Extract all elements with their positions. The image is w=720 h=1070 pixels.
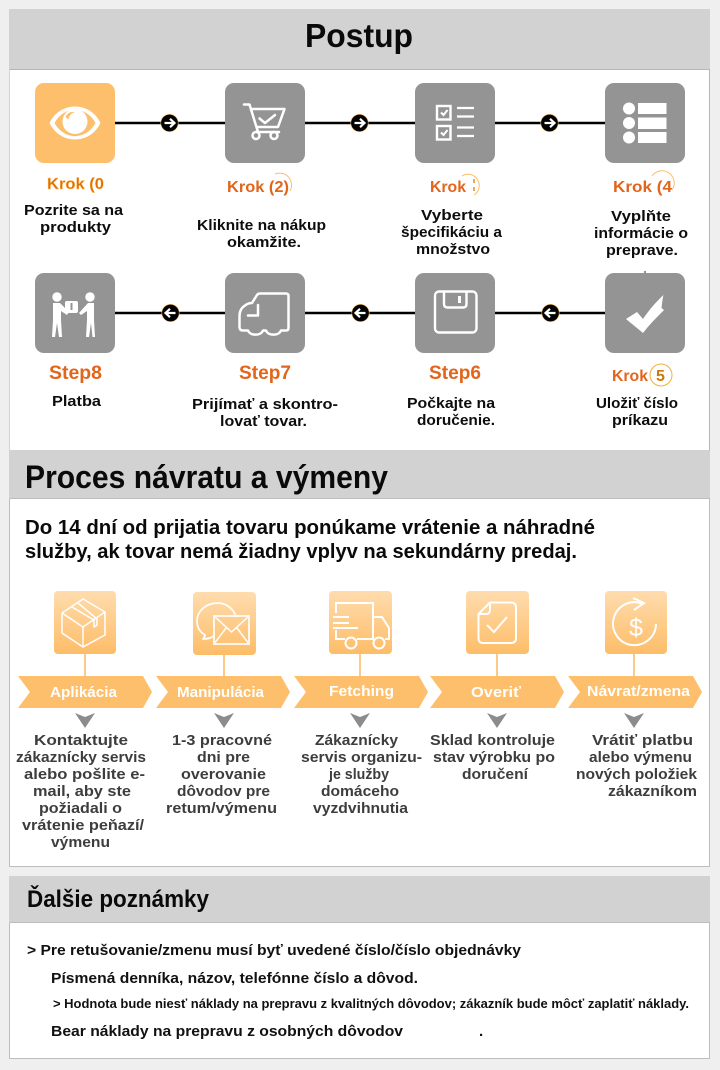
icon: money back xyxy=(605,591,667,654)
step 3 text: množstvo xyxy=(416,242,490,258)
step 3 text: Vyberte xyxy=(421,208,483,224)
panel: Postup xyxy=(9,9,710,451)
icon: checklist xyxy=(415,83,495,163)
step 1 text: Pozrite sa na xyxy=(24,203,124,219)
step 2 text xyxy=(197,218,326,251)
step 2 text: okamžite. xyxy=(227,235,301,251)
step 5 text: Uložiť číslo xyxy=(596,396,678,412)
column text: Aplikácia: mail, aby ste xyxy=(33,784,131,800)
step 4 label xyxy=(613,171,674,196)
notes text: Bear náklady na prepravu z osobných dôvodov xyxy=(51,1023,404,1040)
notes text: > Hodnota bude niesť náklady na prepravu z kvalitných dôvodov; zákazník bude môcť zaplatiť náklady. xyxy=(53,997,689,1011)
step 1 text: produkty xyxy=(40,220,111,236)
column text: Aplikácia: Kontaktujte xyxy=(34,733,128,749)
column text: Overiť: stav výrobku po xyxy=(433,750,555,766)
step 2 label: Krok (2) xyxy=(227,179,289,196)
column text: Fetching xyxy=(301,733,422,817)
column text: Manipulácia: overovanie xyxy=(181,767,266,783)
notes text: Písmená denníka, názov, telefónne číslo a dôvod. xyxy=(51,970,418,987)
step 6 text: Počkajte na xyxy=(407,396,496,412)
chevron: Overiť xyxy=(430,676,564,708)
column text: Manipulácia: 1-3 pracovné xyxy=(172,733,272,749)
chevron: Návrat/zmena xyxy=(568,676,702,708)
step 3 label: Krok xyxy=(430,179,466,196)
step 1 label: Krok (0 xyxy=(47,176,104,193)
heading: Postup: Postup xyxy=(305,17,413,54)
column text: Návrat/zmena: Vrátiť platbu xyxy=(592,733,693,749)
step 4 text: Vyplňte xyxy=(611,209,671,225)
intro text: Do 14 dní od prijatia tovaru ponúkame vrátenie a náhradné xyxy=(25,517,595,539)
icon: parcel box xyxy=(54,591,116,654)
step 5 text xyxy=(596,396,678,429)
step 1 text xyxy=(24,203,124,236)
step 6 text xyxy=(407,396,496,429)
step 7 text: lovať tovar. xyxy=(220,414,307,430)
step 8 label: Step8 xyxy=(49,363,102,384)
icon: two people with parcel xyxy=(35,273,115,353)
icon: delivery truck xyxy=(329,591,392,654)
chevron: Aplikácia xyxy=(18,676,152,708)
arrows: top row xyxy=(161,114,558,132)
column text: Fetching: servis organizu- xyxy=(301,750,422,766)
step 4 text xyxy=(594,209,688,259)
stems xyxy=(85,654,634,677)
step 7 text: Prijímať a skontro- xyxy=(192,397,338,413)
icon: check mark xyxy=(605,273,685,353)
column text: Fetching: domáceho xyxy=(321,784,399,800)
step 3 text xyxy=(401,208,503,258)
column text: Fetching: je služby xyxy=(328,767,389,783)
column text: Manipulácia xyxy=(166,733,277,817)
column text: Overiť: doručení xyxy=(462,767,529,783)
column text: Aplikácia: vrátenie peňazí/ xyxy=(22,818,144,834)
icon: form list xyxy=(605,83,685,163)
chevron: Návrat/zmena: Návrat/zmena xyxy=(587,684,691,700)
column text: Návrat/zmena xyxy=(576,733,698,800)
heading: Proces návratu a výmeny: Proces návratu a výmeny xyxy=(25,459,388,495)
step 6 text: doručenie. xyxy=(417,413,495,429)
step 6 label: Step6 xyxy=(429,363,481,384)
intro text xyxy=(25,517,595,563)
chevron: Fetching: Fetching xyxy=(329,684,394,700)
notes text: . xyxy=(479,1023,483,1040)
column text: Návrat/zmena: zákazníkom xyxy=(608,784,697,800)
step 7 text xyxy=(192,397,338,430)
column text: Aplikácia: požiadali o xyxy=(39,801,122,817)
notes text xyxy=(27,942,689,1040)
step 4 text: informácie o xyxy=(594,226,688,242)
icon: speech bubble and envelope xyxy=(193,592,256,655)
step 5 label: 5 xyxy=(656,368,665,385)
icon: shopping cart xyxy=(225,83,305,163)
step 3 text: špecifikáciu a xyxy=(401,225,503,241)
step 5 label xyxy=(612,364,672,386)
column text: Manipulácia: dni pre xyxy=(197,750,250,766)
arrows: bottom row xyxy=(162,304,559,322)
step 5 label: Krok xyxy=(612,368,648,385)
column text: Aplikácia: zákaznícky servis xyxy=(16,750,146,766)
column text: Overiť xyxy=(430,733,555,783)
column text: Aplikácia: výmenu xyxy=(51,835,110,851)
icon: eye xyxy=(35,83,115,163)
chevron: Aplikácia: Aplikácia xyxy=(50,685,118,701)
intro text: služby, ak tovar nemá žiadny vplyv na sekundárny predaj. xyxy=(25,541,577,563)
step 4 label: Krok (4 xyxy=(613,179,672,196)
column text: Návrat/zmena: nových položiek xyxy=(576,767,698,783)
chevron: Manipulácia xyxy=(156,676,290,708)
step 7 label: Step7 xyxy=(239,363,291,384)
notes text: > Pre retušovanie/zmenu musí byť uvedené číslo/číslo objednávky xyxy=(27,942,522,959)
step 2 label xyxy=(227,173,292,196)
connector lines xyxy=(115,123,605,313)
stray tick above check icon xyxy=(644,271,646,273)
icon: money back: $ xyxy=(629,614,643,642)
column text: Aplikácia: alebo pošlite e- xyxy=(24,767,145,783)
icon: delivery van xyxy=(225,273,305,353)
column text: Aplikácia xyxy=(16,733,146,851)
chevron: Fetching xyxy=(294,676,428,708)
panel: additional notes xyxy=(9,876,710,1058)
heading: Ďalšie poznámky: Ďalšie poznámky xyxy=(27,885,210,913)
panel: return and exchange process xyxy=(9,451,710,866)
chevron: Manipulácia: Manipulácia xyxy=(177,685,265,701)
step 3 label xyxy=(430,174,479,196)
column text: Fetching: vyzdvihnutia xyxy=(313,801,409,817)
down pointers xyxy=(75,713,644,728)
icon: document with check xyxy=(466,591,529,654)
step 5 text: príkazu xyxy=(612,413,668,429)
column text: Overiť: Sklad kontroluje xyxy=(430,733,555,749)
step 2 text: Kliknite na nákup xyxy=(197,218,326,234)
step 8 text: Platba xyxy=(52,394,102,410)
chevron: Overiť: Overiť xyxy=(471,685,521,701)
column text: Manipulácia: retum/výmenu xyxy=(166,801,277,817)
column text: Manipulácia: dôvodov pre xyxy=(177,784,270,800)
step 4 text: preprave. xyxy=(606,243,678,259)
column text: Fetching: Zákaznícky xyxy=(315,733,398,749)
icon: floppy disk xyxy=(415,273,495,353)
column text: Návrat/zmena: alebo výmenu xyxy=(589,750,692,766)
